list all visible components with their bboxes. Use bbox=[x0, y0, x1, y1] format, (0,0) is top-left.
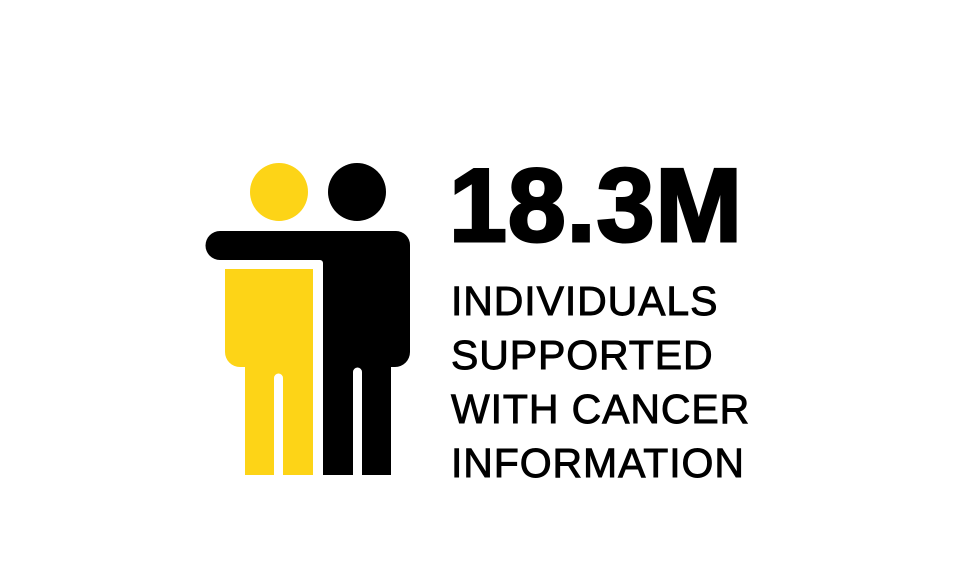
statistic number: 18.3M bbox=[449, 148, 743, 264]
description text bbox=[450, 278, 750, 486]
icon: yellow person bbox=[225, 163, 313, 475]
description text: SUPPORTED bbox=[451, 332, 714, 378]
icon: black person bbox=[206, 163, 410, 475]
description text: INFORMATION bbox=[451, 440, 745, 486]
description text: INDIVIDUALS bbox=[451, 278, 718, 324]
description text: WITH CANCER bbox=[451, 386, 750, 432]
